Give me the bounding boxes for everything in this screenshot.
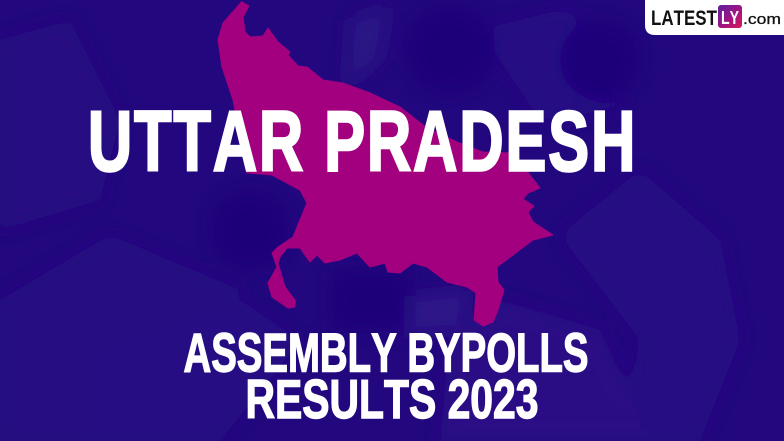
title: Uttar Pradesh: UTTAR PRADESH [88,94,637,189]
subtitle: Assembly Bypolls Results 2023: RESULTS 2023 [246,368,538,430]
logo: LatestLY.com: .com [743,11,781,28]
logo: LatestLY.com: LY [721,8,739,28]
map of Uttar Pradesh [218,2,553,326]
logo: LatestLY.com: LATEST [651,7,717,30]
logo: LatestLY.com [645,0,784,35]
subtitle: Assembly Bypolls Results 2023 [184,322,588,430]
subtitle: Assembly Bypolls Results 2023: ASSEMBLY BYPOLLS [184,322,588,384]
